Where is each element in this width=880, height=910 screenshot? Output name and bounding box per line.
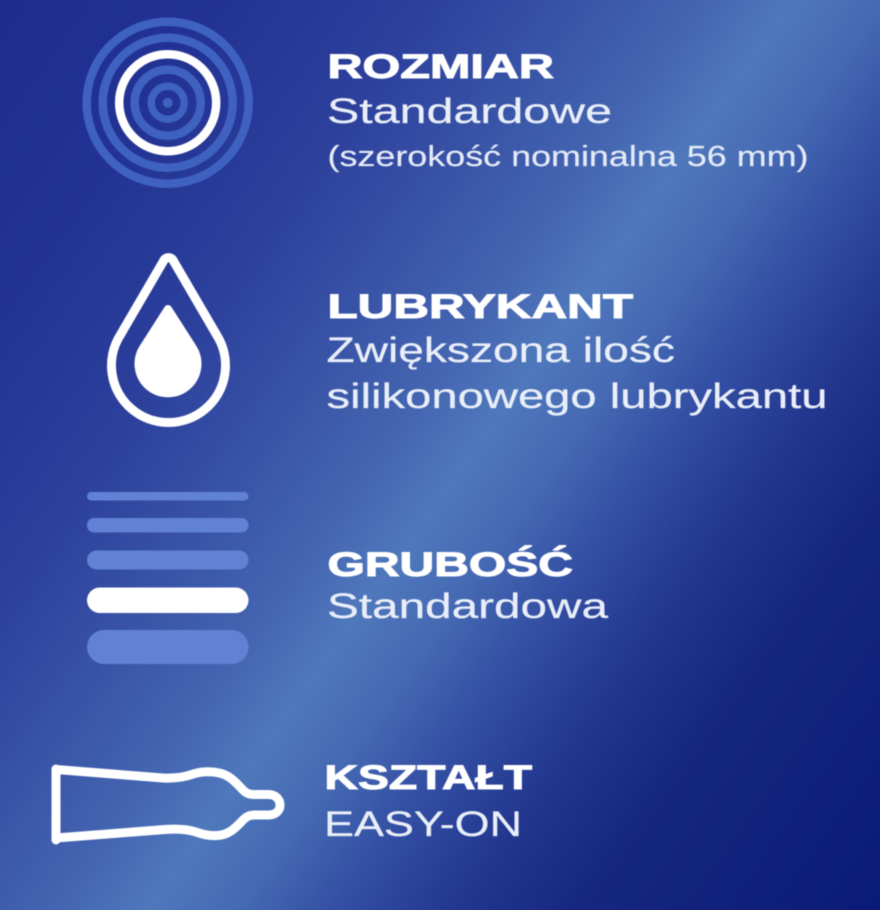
text: nominal width: (szerokość nominalna 56 mm) bbox=[328, 141, 808, 173]
text block: shape bbox=[324, 759, 532, 844]
heading: ROZMIAR: ROZMIAR bbox=[328, 48, 554, 86]
text: Standardowe: Standardowe bbox=[327, 92, 612, 131]
text block: thickness bbox=[327, 546, 609, 626]
icon: thickness bars bbox=[87, 492, 248, 664]
text: silikonowego lubrykantu: silikonowego lubrykantu bbox=[326, 377, 828, 416]
icon: shape outline bbox=[56, 769, 280, 840]
text: Zwiększona ilość: Zwiększona ilość bbox=[326, 331, 675, 370]
text: Standardowa: Standardowa bbox=[327, 587, 609, 626]
heading: LUBRYKANT: LUBRYKANT bbox=[328, 288, 633, 326]
text: EASY-ON: EASY-ON bbox=[324, 805, 522, 844]
icon: lubricant drop bbox=[112, 258, 226, 423]
text block: size bbox=[327, 48, 808, 173]
heading: KSZTAŁT: KSZTAŁT bbox=[324, 759, 532, 797]
icon: concentric rings (size) bbox=[87, 22, 249, 184]
heading: GRUBOŚĆ: GRUBOŚĆ bbox=[328, 546, 573, 584]
text block: lubricant bbox=[326, 288, 828, 416]
